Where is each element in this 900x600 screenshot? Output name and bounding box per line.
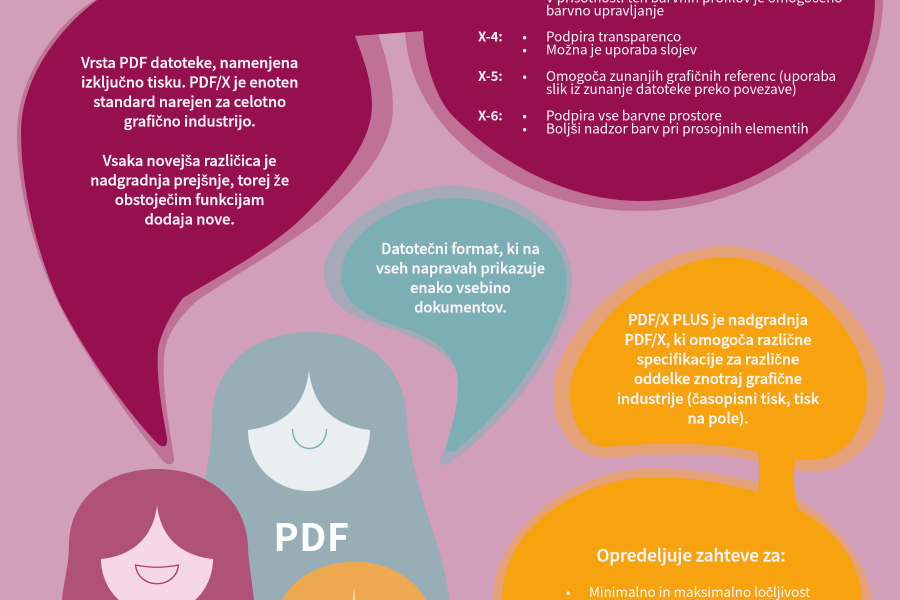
bubble: right maroon with version list [350,0,875,201]
text: version list: • [522,38,527,58]
doll smile [292,429,326,448]
text: version list: • [522,65,527,85]
heading: requirements: Opredeljuje zahteve za: [596,542,786,566]
text: PDF/X PLUS description: industrije (časopisni tisk, tisk [617,388,820,409]
text: PDF/X definition: standard narejen za celotno [93,91,286,112]
text: version list [478,0,843,138]
text: version list: Podpira transparenco [546,26,681,46]
text: version list: • [522,104,527,124]
text: PDF description: Datotečni format, ki na [381,238,540,259]
text: PDF/X definition: izključno tisku. PDF/X je enoten [81,72,298,92]
teal bubble [341,198,567,452]
text: PDF/X definition: dodaja nove. [145,208,235,230]
orange bubble shadow: upper [553,246,885,472]
text: version list: Podpira vse barvne prostore [546,104,722,124]
doll face [248,370,370,491]
text: version list: • [522,118,527,138]
teal bubble shadow [324,186,572,465]
doll body [200,332,449,600]
text: PDF description: vseh napravah prikazuje [376,258,545,278]
text: version list: barvno upravljanje [546,0,664,20]
text: PDF/X definition: Vsaka novejša različica je [102,150,277,171]
icon: PDF/X doll [62,469,254,600]
bubble: left maroon with definition [21,0,423,446]
panel: teal speech bubble [324,186,572,465]
text: PDF/X PLUS description: PDF/X, ki omogoča različne [624,329,812,350]
text: version list: X-6: [478,106,503,124]
text: PDF/X definition [80,52,298,230]
icon: PDF/X PLUS doll [282,562,426,600]
text: PDF/X definition: nadgradnja prejšnje, torej že [90,170,289,190]
text: PDF/X PLUS description: specifikacije za različne [637,349,799,370]
doll smile [136,565,178,584]
doll face [101,505,213,600]
text: PDF/X PLUS description: PDF/X PLUS je nadgradnja [628,309,808,330]
text: PDF/X definition: grafično industrijo. [124,111,256,132]
text: PDF/X definition: obstoječim funkcijam [115,189,265,210]
orange bubble: upper and lower joined [502,257,867,600]
text: version list: Boljši nadzor barv pri prosojnih elementih [546,118,809,138]
bubble shadow: right [405,0,883,211]
orange bubble shadow: lower [493,468,872,600]
text: PDF/X PLUS description: na pole). [687,408,749,429]
text: version list: X-5: [478,66,503,85]
text: version list: Možna je uporaba slojev [546,38,697,58]
panel: orange speech bubbles [493,246,885,600]
text: PDF description: dokumentov. [414,297,507,318]
doll face tip [353,588,355,600]
text: PDF description [376,238,545,318]
text: version list: slik iz zunanje datoteke preko povezave) [546,78,797,98]
text: version list: • [522,26,527,46]
label: PDF: PDF [273,507,350,562]
text: version list: X-4: [478,26,503,46]
text: PDF/X PLUS description: oddelke znotraj grafične [634,368,802,389]
doll hair [62,469,254,600]
text: PDF/X definition: Vrsta PDF datoteke, namenjena [80,52,298,73]
doll hair [282,562,426,600]
bubble shadow: left [17,0,393,464]
text: version list: Omogoča zunanjih grafičnih referenc (uporaba [546,65,836,85]
icon: PDF doll [200,332,449,600]
panel: top maroon speech bubbles [17,0,883,464]
text: PDF description: enako vsebino [410,277,511,298]
text: PDF/X PLUS description [617,309,820,429]
